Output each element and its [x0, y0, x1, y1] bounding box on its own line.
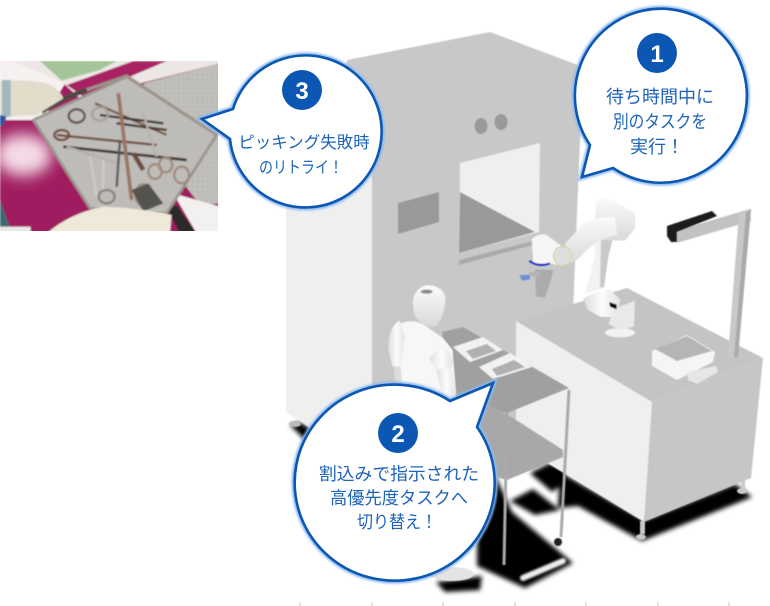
white table corner [176, 194, 218, 231]
bubble 2 text [319, 464, 479, 532]
cabinet grey faces [340, 32, 583, 470]
bubble 3 text: ピッキング失敗時 [238, 133, 370, 152]
forearm [565, 217, 617, 263]
arm base [605, 328, 635, 337]
sensor frame with camera [667, 209, 751, 357]
floor shadow highlight [523, 561, 563, 578]
caster [554, 538, 562, 546]
number badge 1: 1 [650, 41, 664, 68]
panel recess [398, 192, 439, 234]
machine cabinet [286, 32, 583, 470]
white upper left [0, 60, 65, 120]
bubble 2: switch to priority task [295, 383, 495, 581]
bubble 3 text [238, 133, 370, 177]
pale highlight [0, 134, 52, 176]
pale wall [10, 60, 220, 98]
metal tray [33, 77, 217, 213]
robot arm [519, 197, 635, 337]
number badge 2: 2 [391, 421, 405, 448]
table feet [636, 480, 747, 540]
torso [395, 321, 457, 400]
left forearm [393, 366, 403, 390]
wrist joint [553, 246, 571, 266]
right forearm [436, 367, 457, 400]
number badge 3: 3 [295, 78, 309, 105]
bubble 3: retry on picking failure [202, 55, 382, 207]
tray handle [85, 74, 194, 119]
bubble 1 text: 実行！ [630, 137, 684, 157]
green panel [40, 61, 117, 81]
table top [516, 288, 763, 402]
bubble 2 text: 高優先度タスクへ [330, 488, 468, 508]
bubble 1 text: 待ち時間中に [606, 87, 714, 107]
shoulder [583, 289, 621, 317]
glove upper left [0, 80, 63, 117]
cuff [2, 80, 11, 117]
cart legs [504, 390, 569, 565]
cabinet holes [474, 114, 508, 134]
window opening [459, 143, 540, 265]
bubble 1 shape [575, 9, 747, 183]
arm pedestal [608, 301, 635, 330]
bubble 2 text: 切り替え！ [357, 512, 437, 532]
bubble 2 text: 割込みで指示された [319, 464, 479, 484]
table front face [516, 321, 652, 522]
number badge 3 [282, 70, 322, 110]
bubble 1: run another task [575, 9, 747, 183]
humanoid robot [388, 285, 474, 581]
bubble 2 shape [295, 383, 495, 581]
tray 1 [453, 337, 503, 362]
lower link [585, 217, 613, 293]
floor shadows [290, 422, 752, 592]
dark mesh patch [132, 183, 163, 212]
blue ring [529, 261, 550, 265]
shoulder port [609, 302, 617, 309]
cabinet foot [289, 421, 301, 427]
cart top shelf [442, 327, 569, 413]
photo tag [0, 227, 31, 233]
number badge 1 [637, 33, 677, 73]
head sensor [421, 290, 433, 294]
stainless cart [442, 327, 569, 565]
number badge 2 [378, 413, 418, 453]
head [413, 285, 446, 327]
instruments [54, 93, 189, 206]
teal corner [0, 200, 10, 228]
scale [652, 335, 718, 384]
table right face [644, 358, 763, 522]
gripper [519, 269, 553, 297]
robot base [430, 567, 474, 581]
background tray [143, 63, 220, 205]
magenta strip [67, 61, 167, 97]
camera [667, 211, 717, 242]
sleeve [0, 115, 7, 127]
tray handle grip [42, 90, 87, 112]
bubble 1 text: 別のタスクを [613, 112, 707, 132]
photo background [0, 60, 220, 233]
dark table gap [168, 204, 196, 231]
lower link shade [600, 237, 613, 287]
work table [516, 288, 763, 540]
left arm [388, 321, 405, 367]
cart lower shelf [470, 395, 563, 480]
elbow [595, 197, 635, 241]
lower glove [47, 207, 172, 233]
tray 2 [479, 353, 532, 379]
bubble 3 text: のリトライ！ [259, 159, 343, 177]
photo: surgical instruments in tray [0, 60, 220, 233]
right upper arm [429, 349, 453, 370]
cabinet left face [286, 110, 372, 468]
bubble 3 shape [202, 55, 382, 207]
bubble 1 text [606, 87, 714, 157]
wrist [532, 234, 572, 266]
